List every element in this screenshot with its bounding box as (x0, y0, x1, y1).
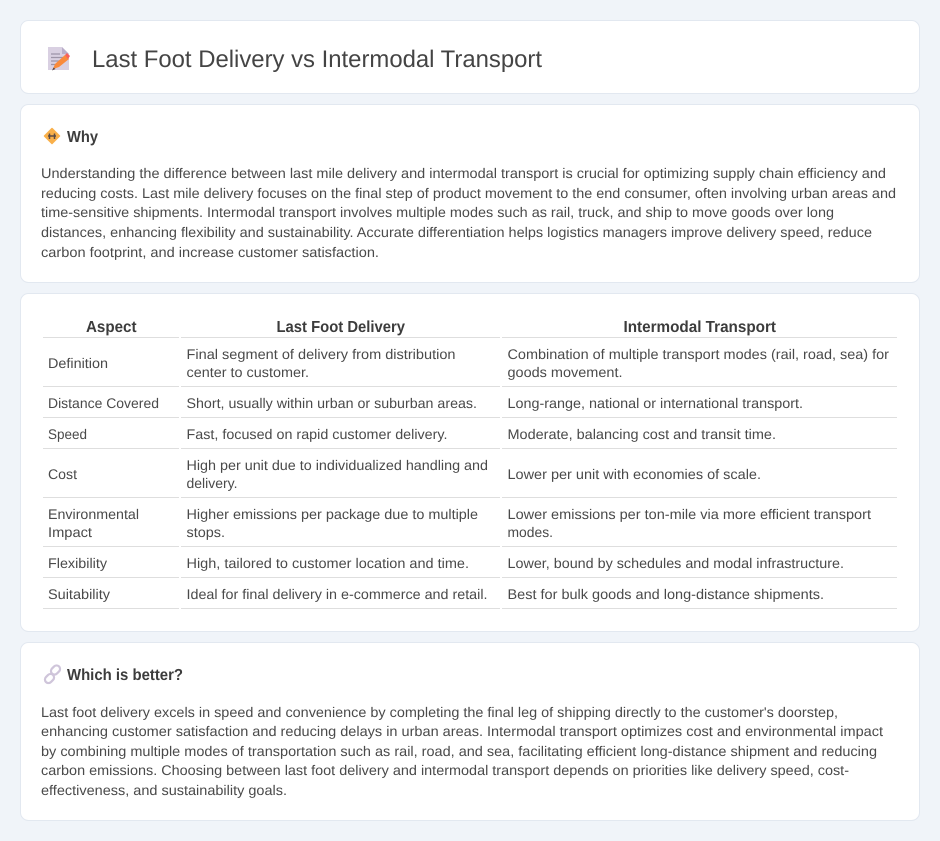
row: definition: center to customer. (186, 364, 309, 380)
row: suitability: Suitability (48, 586, 110, 602)
row: speed: Moderate, balancing cost and transit time. (508, 426, 776, 442)
heading: why: Why (67, 129, 98, 146)
icon: link (43, 664, 62, 685)
row: environmental impact: Environmental (48, 506, 139, 522)
row: environmental impact: Lower emissions per ton-mile via more efficient transport (508, 506, 871, 522)
row: flexibility: Lower, bound by schedules and modal infrastructure. (508, 555, 844, 571)
table header row: Aspect (86, 319, 137, 336)
text block: why paragraph: time-sensitive shipments. Intermodal transport involves multiple modes such as rail, truck, and ship to move goods over long (41, 204, 834, 220)
text block: which is better paragraph: by combining multiple modes of transportation such as rail, road, and sea, facilitating efficient long-distance shipment and reducing (41, 743, 877, 759)
row: definition: Definition (48, 355, 108, 371)
text block: which is better paragraph: enhancing customer satisfaction and reducing delays in urban areas. Intermodal transport optimizes cost and environmental impact (41, 723, 883, 739)
row: definition: goods movement. (508, 364, 622, 380)
text block: which is better paragraph: effectiveness, and sustainability goals. (41, 782, 287, 798)
row: flexibility: Flexibility (48, 555, 107, 571)
panel: page header (20, 20, 920, 94)
row: distance covered: Short, usually within urban or suburban areas. (186, 395, 477, 411)
row: environmental impact: Impact (48, 524, 92, 540)
text block: which is better paragraph (41, 704, 883, 798)
title: Last Foot Delivery vs Intermodal Transport (92, 46, 542, 73)
row: cost: Lower per unit with economies of scale. (508, 466, 761, 482)
row: distance covered: Long-range, national or international transport. (508, 395, 803, 411)
row: suitability: Best for bulk goods and long-distance shipments. (508, 586, 824, 602)
row: speed: Speed (48, 426, 87, 442)
text block: why paragraph: Understanding the difference between last mile delivery and intermodal transport is crucial for optimizing supply chain efficiency and (41, 165, 886, 181)
icon: memo with pencil (48, 47, 70, 70)
panel: why (20, 104, 920, 282)
table header row: Last Foot Delivery (276, 319, 405, 336)
table header row (86, 319, 777, 336)
icon: warning diamond (44, 128, 60, 144)
row: suitability: Ideal for final delivery in e-commerce and retail. (186, 586, 488, 602)
row: definition (48, 346, 889, 380)
heading: which is better: Which is better? (67, 667, 183, 684)
row: environmental impact (48, 506, 871, 540)
row: suitability (48, 586, 824, 602)
row: definition: Final segment of delivery from distribution (186, 346, 456, 362)
row: cost: Cost (48, 466, 77, 482)
panel: which is better (20, 642, 920, 820)
row: cost: High per unit due to individualized handling and (186, 457, 488, 473)
text block: why paragraph (41, 165, 896, 260)
row: speed (48, 426, 776, 442)
text block: which is better paragraph: carbon emissions. Choosing between last foot delivery and intermodal transport depends on priorities like delivery speed, cost- (41, 762, 849, 778)
table rules (43, 338, 897, 608)
row: environmental impact: Higher emissions per package due to multiple (186, 506, 478, 522)
text block: why paragraph: reducing costs. Last mile delivery focuses on the final step of product movement to the end consumer, often involving urban areas and (41, 185, 896, 201)
row: environmental impact: modes. (508, 524, 553, 540)
row: cost (48, 457, 761, 491)
text block: which is better paragraph: Last foot delivery excels in speed and convenience by completing the final leg of shipping directly to the customer's doorstep, (41, 704, 838, 720)
row: flexibility: High, tailored to customer location and time. (186, 555, 469, 571)
text block: why paragraph: carbon footprint, and increase customer satisfaction. (41, 244, 379, 260)
row: definition: Combination of multiple transport modes (rail, road, sea) for (508, 346, 889, 362)
row: speed: Fast, focused on rapid customer delivery. (186, 426, 448, 442)
table header row: Intermodal Transport (624, 319, 777, 336)
row: cost: delivery. (186, 475, 238, 491)
text block: why paragraph: distances, enhancing flexibility and sustainability. Accurate differentiation helps logistics managers improve delivery speed, reduce (41, 224, 872, 240)
row: environmental impact: stops. (186, 524, 225, 540)
panel: comparison table (20, 294, 920, 632)
row: distance covered (48, 395, 803, 411)
row: distance covered: Distance Covered (48, 395, 159, 411)
row: flexibility (48, 555, 844, 571)
